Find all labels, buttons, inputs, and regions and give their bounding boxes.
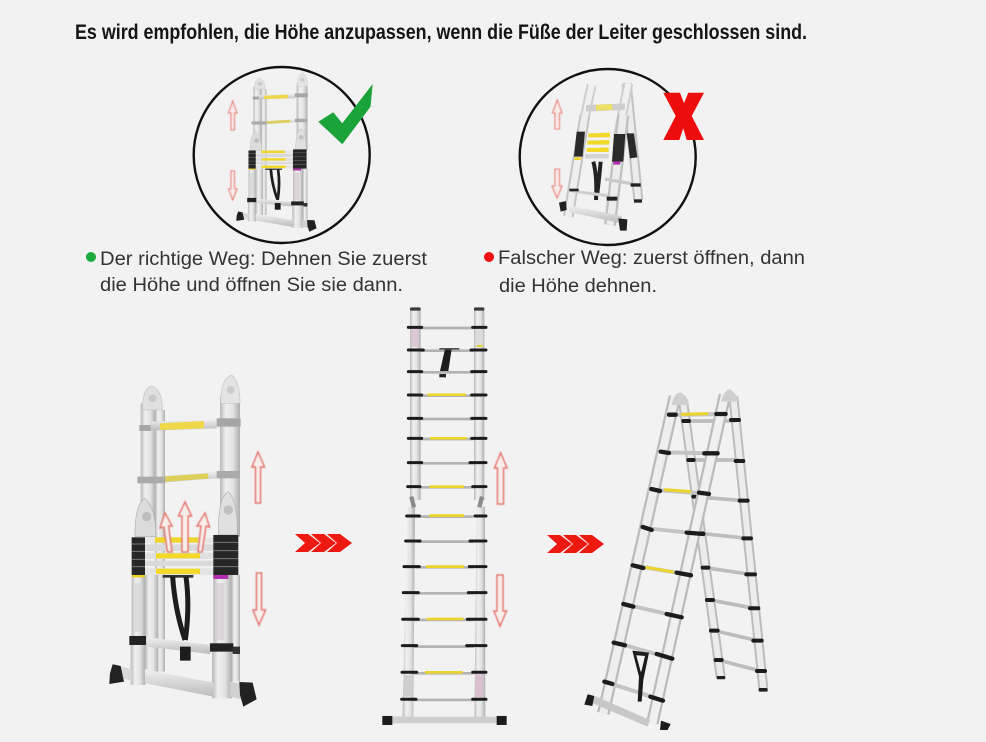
chevron 3	[327, 534, 352, 552]
bullet: green	[86, 252, 96, 262]
text: correct way line 2: die Höhe und öffnen Sie sie dann.	[100, 275, 403, 296]
title: Es wird empfohlen, die Höhe anzupassen, wenn die Füße der Leiter geschlossen sind.	[75, 21, 807, 44]
ladder: extended straight	[382, 307, 507, 725]
text block: wrong way	[484, 248, 805, 297]
arrow: up right inner	[197, 513, 210, 552]
chevrons: first transition	[295, 534, 352, 552]
ladder: closed large	[109, 375, 257, 707]
arrow group: large ladder arrows	[160, 452, 266, 625]
arrow: down	[552, 169, 562, 198]
text: wrong way line 2: die Höhe dehnen.	[499, 276, 657, 297]
arrow group: straight ladder arrows	[494, 453, 507, 626]
text: correct way line 1: Der richtige Weg: Dehnen Sie zuerst	[100, 249, 428, 270]
ladder: closed small	[236, 73, 317, 232]
text block: correct way	[86, 249, 428, 296]
chevron 1	[547, 535, 572, 553]
ladder: A-frame	[584, 389, 768, 730]
arrow: up left	[160, 513, 172, 552]
circle: correct way	[194, 67, 370, 243]
arrow: up right	[252, 452, 264, 503]
text: wrong way line 1: Falscher Weg: zuerst öffnen, dann	[498, 248, 805, 269]
circle: wrong way	[520, 69, 696, 245]
arrow: down	[228, 171, 237, 200]
chevron 1	[295, 534, 320, 552]
icon: red X	[663, 93, 704, 140]
chevron 2	[563, 535, 588, 553]
panel: wrong way illustration	[520, 69, 704, 245]
icon: green check mark	[318, 84, 373, 144]
bullet: red	[484, 252, 494, 262]
ladder: opened small	[559, 83, 642, 231]
chevron 2	[311, 534, 336, 552]
arrow: down	[494, 575, 506, 626]
arrow: up	[494, 453, 507, 504]
chevron 3	[579, 535, 604, 553]
arrow: down right	[253, 573, 266, 625]
arrow: up middle	[178, 502, 192, 552]
panel: correct way illustration	[194, 67, 373, 243]
chevrons: second transition	[547, 535, 604, 553]
arrow: up	[552, 100, 562, 129]
arrow: up	[228, 101, 237, 130]
